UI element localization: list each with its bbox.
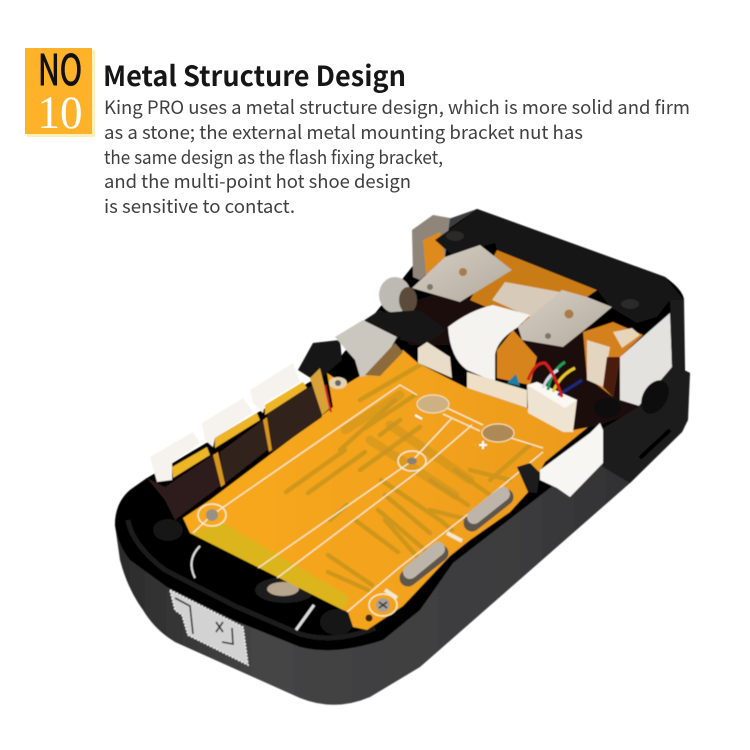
silver bracket right	[518, 290, 612, 347]
connector white with wires	[527, 362, 582, 432]
device body: outer shell	[115, 209, 690, 705]
badge: NO 10	[25, 37, 95, 139]
connector left	[418, 342, 452, 378]
right black wall	[600, 300, 690, 483]
rim highlight	[128, 520, 375, 638]
connector middle	[467, 372, 527, 408]
contact pads	[417, 395, 514, 442]
white clip	[540, 423, 603, 497]
blue tab	[507, 374, 520, 386]
crystals	[385, 494, 505, 598]
rubber bumper	[593, 398, 621, 418]
badge: NO 10: NO	[38, 37, 82, 98]
memory cards row	[147, 363, 322, 520]
label sticker	[170, 590, 248, 665]
screw posts on rim	[153, 519, 354, 635]
description text: as a stone; the external metal mounting bracket nut has	[104, 119, 583, 145]
black post and solder tab	[298, 340, 342, 415]
badge: NO 10: 10	[38, 87, 82, 139]
mounting hole	[398, 451, 426, 471]
orange flex reveal	[497, 330, 537, 385]
silver bracket left	[412, 245, 512, 302]
description text: King PRO uses a metal structure design, which is more solid and firm	[104, 94, 690, 120]
tray interior and rim	[115, 209, 685, 650]
optical window and orange cavity	[470, 250, 597, 330]
silver side plate	[620, 313, 672, 407]
top black cover	[435, 209, 684, 323]
USB port	[335, 310, 405, 377]
description text	[104, 94, 690, 219]
cavity right	[583, 322, 643, 397]
description text: the same design as the flash fixing bracket,	[104, 144, 443, 170]
board screws	[198, 377, 397, 622]
white ribbon cable	[448, 305, 530, 382]
PCB board	[183, 350, 593, 630]
audio jack	[379, 277, 447, 345]
speaker and wires	[191, 546, 315, 630]
PCB yellow edge strip	[190, 523, 350, 610]
PCB traces	[286, 365, 530, 590]
left side metal frame	[412, 215, 450, 280]
small pin header	[517, 463, 540, 493]
back orange flex behind connectors	[497, 330, 537, 385]
polarity marks	[415, 415, 487, 449]
title: Metal Structure Design	[103, 55, 406, 95]
upper assembly: dark interior	[380, 290, 650, 432]
description text: and the multi-point hot shoe design	[104, 168, 411, 194]
PCB white lines	[193, 385, 543, 612]
description text: is sensitive to contact.	[104, 193, 295, 219]
device photo illustration	[115, 209, 690, 705]
